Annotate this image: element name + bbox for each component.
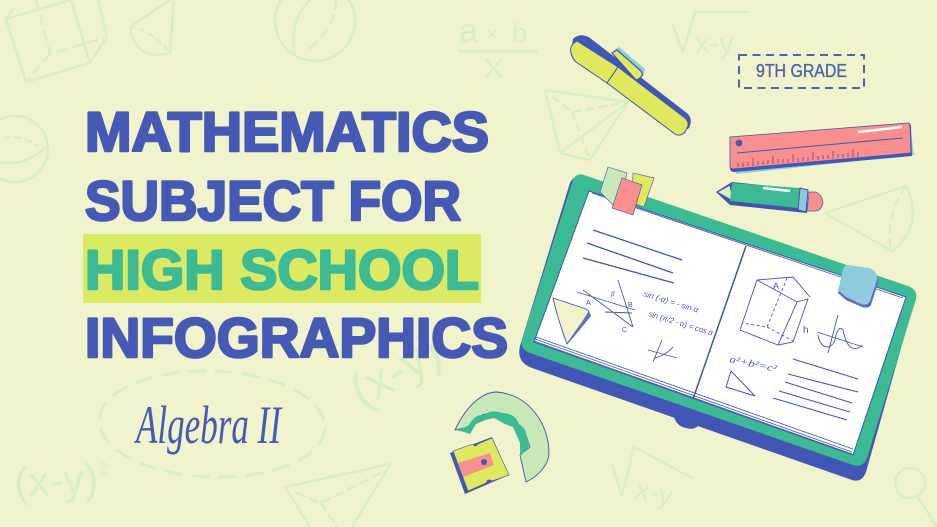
prism drawing: h <box>803 325 809 336</box>
prism drawing: A <box>773 281 779 291</box>
clasp: blue <box>838 266 878 308</box>
triangle diagram: B <box>628 302 633 309</box>
icon: cube doodle <box>6 0 107 82</box>
bookmark: yellow tab <box>632 173 654 207</box>
book page layers <box>534 191 906 455</box>
white page sheet <box>538 194 903 447</box>
book bottom tab <box>673 413 700 429</box>
icon: magnifier doodle <box>895 468 937 527</box>
title line: infographics: INFOGRAPHICS <box>85 306 508 369</box>
formula doodle a x b over x: × <box>486 24 498 46</box>
icon: cone doodle <box>130 0 174 55</box>
bookmark: green tab <box>600 167 627 210</box>
icon: pyramid doodle bottom <box>285 464 390 527</box>
icon: cone doodle right <box>825 186 913 251</box>
teal inner edge <box>455 411 529 457</box>
icon: protractor and sharpener <box>450 392 549 494</box>
protractor arc <box>455 392 549 482</box>
formula doodle a x b over x: a <box>459 12 478 50</box>
title line: mathematics: MATHEMATICS <box>85 100 489 163</box>
sharpener <box>450 437 509 494</box>
triangle diagram <box>577 280 635 334</box>
folded page corner <box>553 298 591 344</box>
triangle diagram: β <box>610 290 615 298</box>
title line: high school: HIGH SCHOOL <box>85 238 479 301</box>
formula doodle root x-y bottom <box>612 447 692 512</box>
subtitle: Algebra II: Algebra II <box>134 395 283 455</box>
icon: sphere doodle <box>275 0 355 61</box>
formula doodle (x-y) squared: 2 <box>99 459 108 478</box>
formula doodle root x-y top: x-y <box>695 28 734 60</box>
small graph <box>648 340 677 362</box>
formula doodle root x-y top <box>672 12 748 60</box>
triangle diagram: C <box>622 327 627 334</box>
panel: open notebook <box>519 167 916 481</box>
formula doodle a x b over x: b <box>512 18 527 48</box>
trigonometric formulas: sin (-α) = - sin α <box>642 289 700 315</box>
icon: highlighter marker <box>571 35 691 135</box>
sine curve graph <box>817 315 863 353</box>
icon: ball doodle left <box>0 116 48 182</box>
icon: pyramid doodle <box>545 90 628 160</box>
title <box>83 100 508 369</box>
formula doodle a x b over x <box>459 12 537 77</box>
formula doodle (x-y) middle: (x-y) <box>341 325 451 419</box>
formula doodle root x-y bottom: x-y <box>633 474 676 512</box>
small triangle <box>726 371 755 396</box>
grade badge: 9TH GRADE <box>756 61 847 81</box>
prism drawing <box>740 277 810 345</box>
icon: pencil <box>716 182 823 213</box>
grade badge <box>739 55 864 88</box>
icon: ruler <box>730 123 914 174</box>
formula a squared: a²+b²=c² <box>728 354 779 375</box>
formula doodle (x-y) squared: (x-y) <box>13 455 99 506</box>
spine <box>693 246 746 399</box>
highlight: yellow band <box>83 234 481 303</box>
bookmark: pink tab <box>612 178 642 215</box>
title line: subject for: SUBJECT FOR <box>85 169 461 232</box>
trigonometric formulas: sin (π/2 - α) = cos α <box>647 309 715 338</box>
left page text lines <box>583 230 682 283</box>
book base <box>519 178 915 481</box>
right page text lines <box>773 359 858 420</box>
triangle diagram: A <box>586 300 591 307</box>
book cover <box>522 174 916 466</box>
dashed ellipse around subtitle <box>97 367 327 481</box>
trigonometric formulas <box>642 289 715 338</box>
